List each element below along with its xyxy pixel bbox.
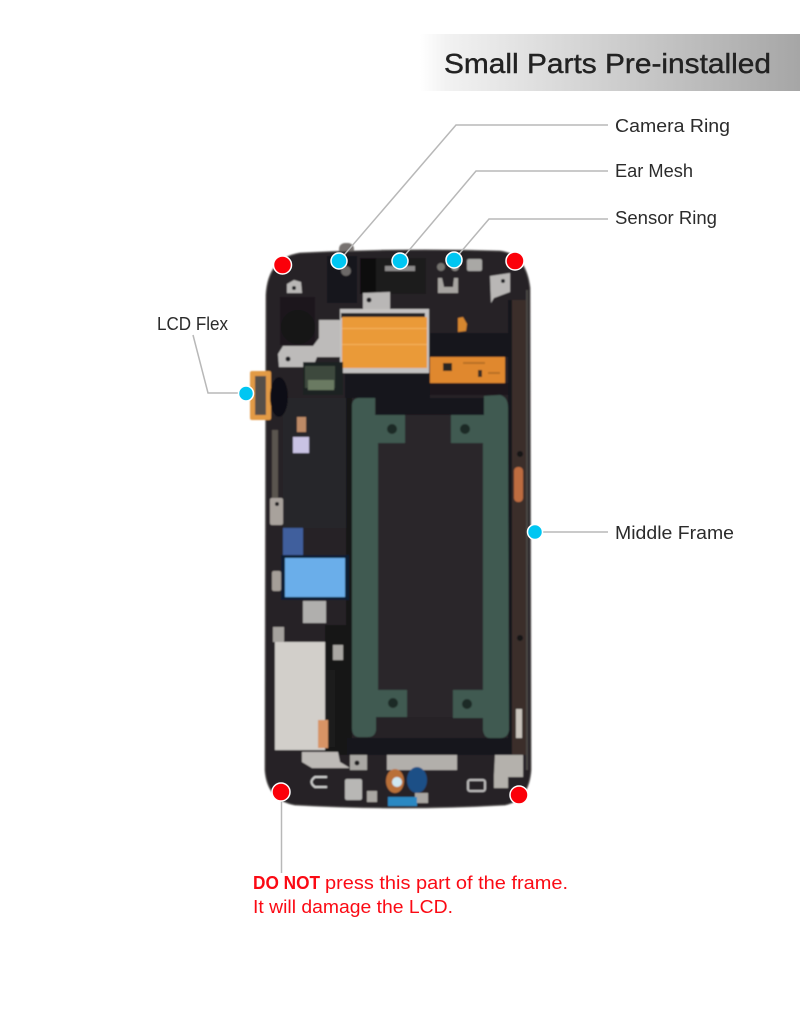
header banner: Small Parts Pre-installed (444, 48, 771, 79)
green tab screw holes (387, 424, 472, 709)
callout: Middle Frame (528, 523, 734, 543)
green adhesive frame right (451, 395, 509, 738)
callout: LCD Flex (157, 314, 254, 401)
recent key icon (468, 780, 485, 791)
light blue tape (281, 555, 349, 600)
dark blue tape (283, 528, 303, 557)
warning text (253, 873, 568, 917)
home button flex (386, 767, 427, 806)
callout: Camera Ring (331, 116, 730, 269)
back key icon (312, 777, 327, 787)
green PCB chip (303, 362, 343, 395)
lavender label (293, 437, 309, 453)
bracket on left rail (270, 498, 283, 525)
right copper strip (514, 467, 523, 502)
warning dot: top right corner (506, 252, 524, 270)
silver plate left (278, 320, 340, 367)
bottom dark bar (347, 738, 508, 755)
warning text: It will damage the LCD. (253, 897, 453, 917)
dark band under gold panel (345, 374, 430, 398)
center top bracket (363, 292, 390, 310)
battery plate silver (275, 642, 325, 750)
right frame strip (508, 300, 512, 755)
right top bracket (490, 273, 510, 303)
dark divider left of adhesive (346, 395, 352, 740)
plate lower bracket (302, 752, 350, 768)
orange sensor board (430, 357, 505, 383)
right strip screws (517, 451, 523, 641)
left frame rail (272, 430, 278, 498)
warning dot: top left corner (274, 256, 292, 274)
dark center panel (378, 443, 483, 690)
left column panel (283, 398, 346, 528)
header banner (420, 34, 800, 91)
sensor bracket (438, 278, 458, 293)
right lower white strip (516, 709, 522, 738)
small copper flex (318, 720, 328, 748)
warning dot: bottom right corner (510, 786, 528, 804)
callout: LCD Flex: LCD Flex (157, 314, 228, 334)
callout: Sensor Ring: Sensor Ring (615, 208, 717, 228)
silver square bottom (345, 779, 362, 800)
bottom silver bracket (367, 755, 457, 803)
callout: Sensor Ring (446, 208, 717, 268)
left speaker circle (280, 297, 315, 345)
bottom small screw bracket (350, 755, 367, 770)
ribbon on plate side (325, 670, 335, 747)
right bottom bracket (494, 755, 523, 788)
top left bracket (287, 280, 302, 293)
dark band above sensor board (430, 333, 508, 357)
warning leader and dot: bottom left corner (272, 783, 290, 873)
warning text: DO NOT (253, 873, 320, 893)
gold flex panel (340, 309, 429, 373)
top dark blocks (327, 256, 357, 303)
camera bump (339, 243, 354, 257)
top of plate screw bracket (273, 627, 284, 642)
callout: Camera Ring: Camera Ring (615, 116, 730, 136)
callout: Ear Mesh: Ear Mesh (615, 161, 693, 181)
green adhesive frame (352, 398, 407, 737)
phone screen assembly rear view (250, 243, 531, 808)
left round component (270, 377, 288, 417)
callout: Middle Frame: Middle Frame (615, 523, 734, 543)
lower left black background (325, 625, 352, 755)
copper tab (297, 417, 306, 432)
LCD flex connector (250, 371, 271, 420)
warning text: press this part of the frame. (325, 873, 568, 893)
small orange tab (458, 317, 467, 332)
frame body (265, 250, 531, 808)
lower rail bracket (272, 571, 281, 591)
callout: Ear Mesh (392, 161, 693, 269)
silver square (303, 601, 326, 623)
